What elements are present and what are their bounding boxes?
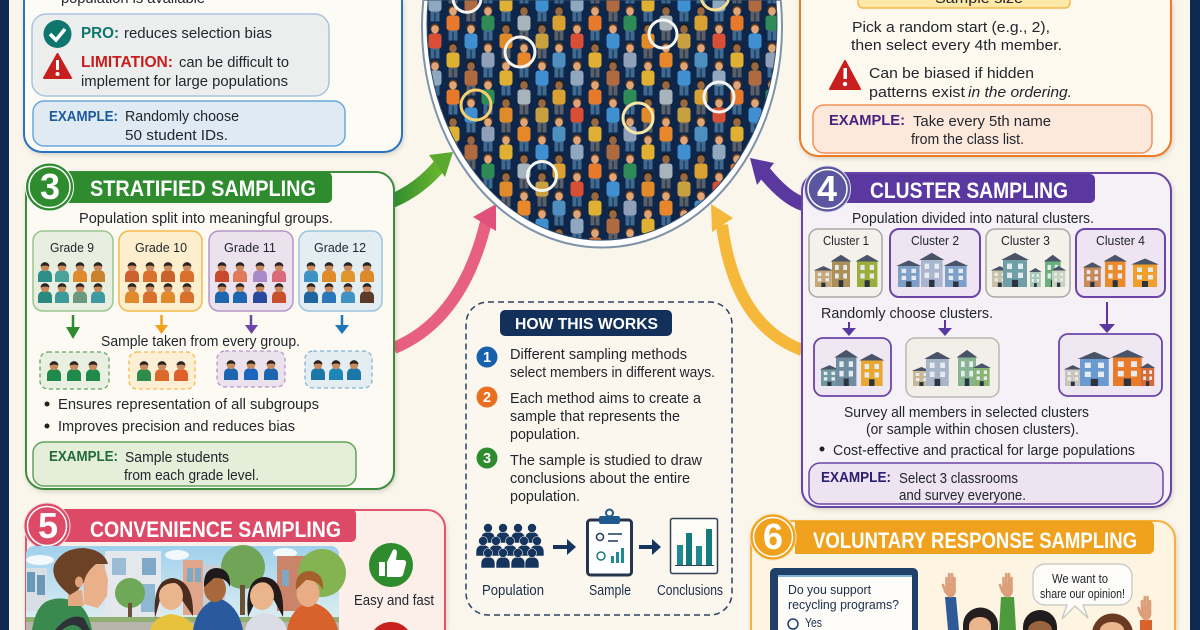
- example box: Select 3 classrooms: [899, 471, 1018, 487]
- person: man: [1023, 610, 1057, 630]
- person: raised arm orange: [1138, 597, 1152, 630]
- labels: Conclusions: [657, 583, 723, 599]
- example box: EXAMPLE:: [829, 112, 905, 129]
- example box: Take every 5th name: [913, 114, 1051, 130]
- cluster 4: Cluster 4: [1096, 233, 1145, 248]
- example box: Randomly choose: [125, 109, 239, 125]
- arrows: to samples: [66, 315, 349, 339]
- bullet list: Improves precision and reduces bias: [58, 419, 295, 435]
- cluster 1: Cluster 1: [823, 233, 869, 248]
- icon: warning: [830, 61, 860, 89]
- sample: grade 10: [129, 352, 195, 389]
- text: pro: reduces selection bias: [124, 26, 272, 42]
- step 3: The sample is studied to draw: [510, 453, 703, 469]
- badge 4: 4: [817, 168, 837, 209]
- icon: thumbs up: [369, 543, 413, 587]
- sample: grade 9: [40, 352, 109, 389]
- step 1: [476, 346, 715, 381]
- step 2: population.: [510, 427, 580, 443]
- example box: and survey everyone.: [899, 488, 1026, 504]
- text: limitation: LIMITATION:: [81, 54, 173, 71]
- cluster 4: [1076, 229, 1165, 297]
- left border strip: [0, 0, 9, 630]
- selected cluster A: [814, 338, 891, 396]
- person: student blue hoodie: [193, 568, 243, 630]
- step 3: population.: [510, 489, 580, 505]
- person: student orange hoodie: [287, 571, 338, 630]
- text: instructions: then select every 4th member.: [851, 38, 1062, 54]
- cluster 2: [890, 229, 980, 297]
- example box: 50 student IDs.: [125, 128, 228, 144]
- person: student striped: [245, 577, 287, 630]
- icon: check: [44, 20, 72, 48]
- text: intro: Population divided into natural clusters.: [852, 211, 1094, 227]
- badge 5: 5: [38, 505, 58, 546]
- panel: cluster sampling: [802, 166, 1171, 507]
- person: interviewer: [32, 548, 108, 630]
- icon: bar chart: [670, 518, 718, 574]
- person: raised arm blue: [943, 574, 959, 630]
- panel: how this works: [466, 302, 732, 615]
- group: grade 10: [119, 231, 202, 311]
- text: bias caution: [869, 66, 1072, 101]
- group: grade 10: Grade 10: [135, 240, 187, 255]
- selected cluster C: [1059, 334, 1162, 396]
- panel: convenience sampling: [24, 503, 445, 630]
- speech bubble: We want to: [1052, 571, 1108, 586]
- cluster 3: Cluster 3: [1001, 233, 1050, 248]
- speech bubble: [1033, 564, 1132, 619]
- group: grade 11: Grade 11: [224, 240, 276, 255]
- text: instructions: [851, 20, 1062, 54]
- text: limitation: [81, 54, 289, 90]
- example box: from each grade level.: [124, 468, 259, 484]
- population crowd circle: [422, 0, 782, 248]
- group: grade 9: Grade 9: [50, 240, 94, 255]
- right border strip: [1190, 0, 1200, 630]
- text: sample taken: Sample taken from every group.: [101, 334, 300, 350]
- cluster 2: Cluster 2: [911, 233, 959, 248]
- text: limitation: can be difficult to: [179, 55, 289, 71]
- example box: EXAMPLE:: [49, 108, 118, 125]
- sample: grade 11: [217, 351, 285, 387]
- survey screen: Yes: [805, 615, 822, 630]
- labels: [482, 583, 723, 599]
- text: easy and fast: Easy and fast: [354, 593, 434, 609]
- arrow: sample to conclusions: [639, 539, 661, 555]
- heading: [50, 172, 332, 203]
- example box: Sample students: [125, 450, 229, 466]
- text: pro: PRO:: [81, 25, 119, 42]
- arrow: population to sample: [553, 539, 576, 555]
- text: survey: (or sample within chosen clusters).: [866, 422, 1079, 438]
- heading: [60, 509, 356, 542]
- step 2: 2: [483, 390, 491, 406]
- pro and limitation box: [32, 14, 329, 96]
- arrow: voluntary response to population: [711, 204, 802, 350]
- badge 5: [24, 503, 70, 549]
- step 2: [476, 386, 702, 443]
- illustration: interviewer and students: [26, 545, 346, 630]
- icon: population: [476, 524, 544, 568]
- step 1: select members in different ways.: [510, 365, 715, 381]
- step 3: [476, 448, 703, 505]
- step 2: Each method aims to create a: [510, 391, 702, 407]
- example box: [33, 442, 356, 486]
- labels: Population: [482, 583, 544, 599]
- text: intro: Population split into meaningful groups.: [79, 211, 333, 227]
- heading: [500, 310, 672, 336]
- arrow: stratified to population: [392, 152, 453, 201]
- group: grade 9: [33, 231, 113, 311]
- step 1: Different sampling methods: [510, 347, 687, 363]
- text: survey: [844, 405, 1089, 438]
- heading: CLUSTER SAMPLING: [870, 178, 1068, 203]
- heading: STRATIFIED SAMPLING: [90, 176, 316, 201]
- person: student yellow: [150, 578, 195, 630]
- example box: [813, 105, 1152, 153]
- person: raised arm green: [999, 574, 1016, 630]
- survey screen: recycling programs?: [788, 597, 899, 612]
- icon: limitation circle: [374, 622, 408, 630]
- step 2: sample that represents the: [510, 409, 680, 425]
- step 1: 1: [483, 350, 491, 366]
- cluster 3: [986, 229, 1070, 297]
- selected member rings: [453, 0, 734, 190]
- bullet list: Ensures representation of all subgroups: [58, 397, 319, 413]
- heading: CONVENIENCE SAMPLING: [90, 517, 341, 542]
- panel: systematic sampling: [800, 0, 1171, 156]
- text: randomly choose: Randomly choose clusters.: [821, 306, 993, 322]
- survey screen: Do you support: [788, 582, 871, 597]
- text: bias caution: in the ordering.: [968, 85, 1072, 101]
- arrows: chosen clusters: [842, 302, 1115, 336]
- text: bias caution: patterns exist: [869, 85, 965, 101]
- example box: [33, 101, 345, 146]
- heading: HOW THIS WORKS: [515, 316, 658, 333]
- arrow: convenience to population: [394, 204, 496, 348]
- heading: [795, 521, 1154, 554]
- sample size pill: [858, 0, 1070, 8]
- group: grade 11: [209, 231, 293, 311]
- icon: clipboard: [588, 510, 632, 575]
- sample: grade 12: [305, 351, 372, 388]
- people raising hands: [943, 574, 1152, 630]
- speech bubble: share our opinion!: [1040, 586, 1125, 601]
- selected cluster B: [906, 338, 999, 397]
- badge 3: [26, 163, 74, 211]
- text: bias caution: Can be biased if hidden: [869, 66, 1034, 82]
- text: survey: Survey all members in selected clusters: [844, 405, 1089, 421]
- text: instructions: Pick a random start (e.g., 2),: [852, 20, 1050, 36]
- example box: from the class list.: [911, 132, 1024, 148]
- panel: stratified sampling: [26, 163, 394, 489]
- heading: VOLUNTARY RESPONSE SAMPLING: [813, 528, 1137, 553]
- arrow: cluster to population: [750, 158, 803, 204]
- labels: Sample: [589, 583, 631, 599]
- panel: simple random sampling: [24, 0, 402, 152]
- cluster 1: [809, 229, 882, 297]
- panel: voluntary response sampling: [750, 514, 1175, 630]
- step 3: 3: [483, 451, 491, 467]
- person: woman brown hair: [1092, 614, 1133, 630]
- group: grade 12: [299, 231, 382, 311]
- badge 3: 3: [40, 166, 60, 207]
- bullet: Cost-effective and practical for large populations: [833, 443, 1135, 459]
- example box: EXAMPLE:: [821, 469, 891, 486]
- icon: warning: [44, 54, 71, 78]
- survey screen: [770, 568, 918, 630]
- bullet list: [44, 397, 319, 435]
- step 3: conclusions about the entire: [510, 471, 690, 487]
- text: limitation: implement for large populations: [81, 74, 288, 90]
- badge 6: 6: [763, 516, 783, 557]
- badge 4: [804, 166, 850, 212]
- example box: EXAMPLE:: [49, 448, 118, 465]
- person: dark-haired woman: [963, 608, 998, 630]
- example box: [809, 463, 1163, 504]
- badge 6: [750, 514, 796, 560]
- group: grade 12: Grade 12: [314, 240, 366, 255]
